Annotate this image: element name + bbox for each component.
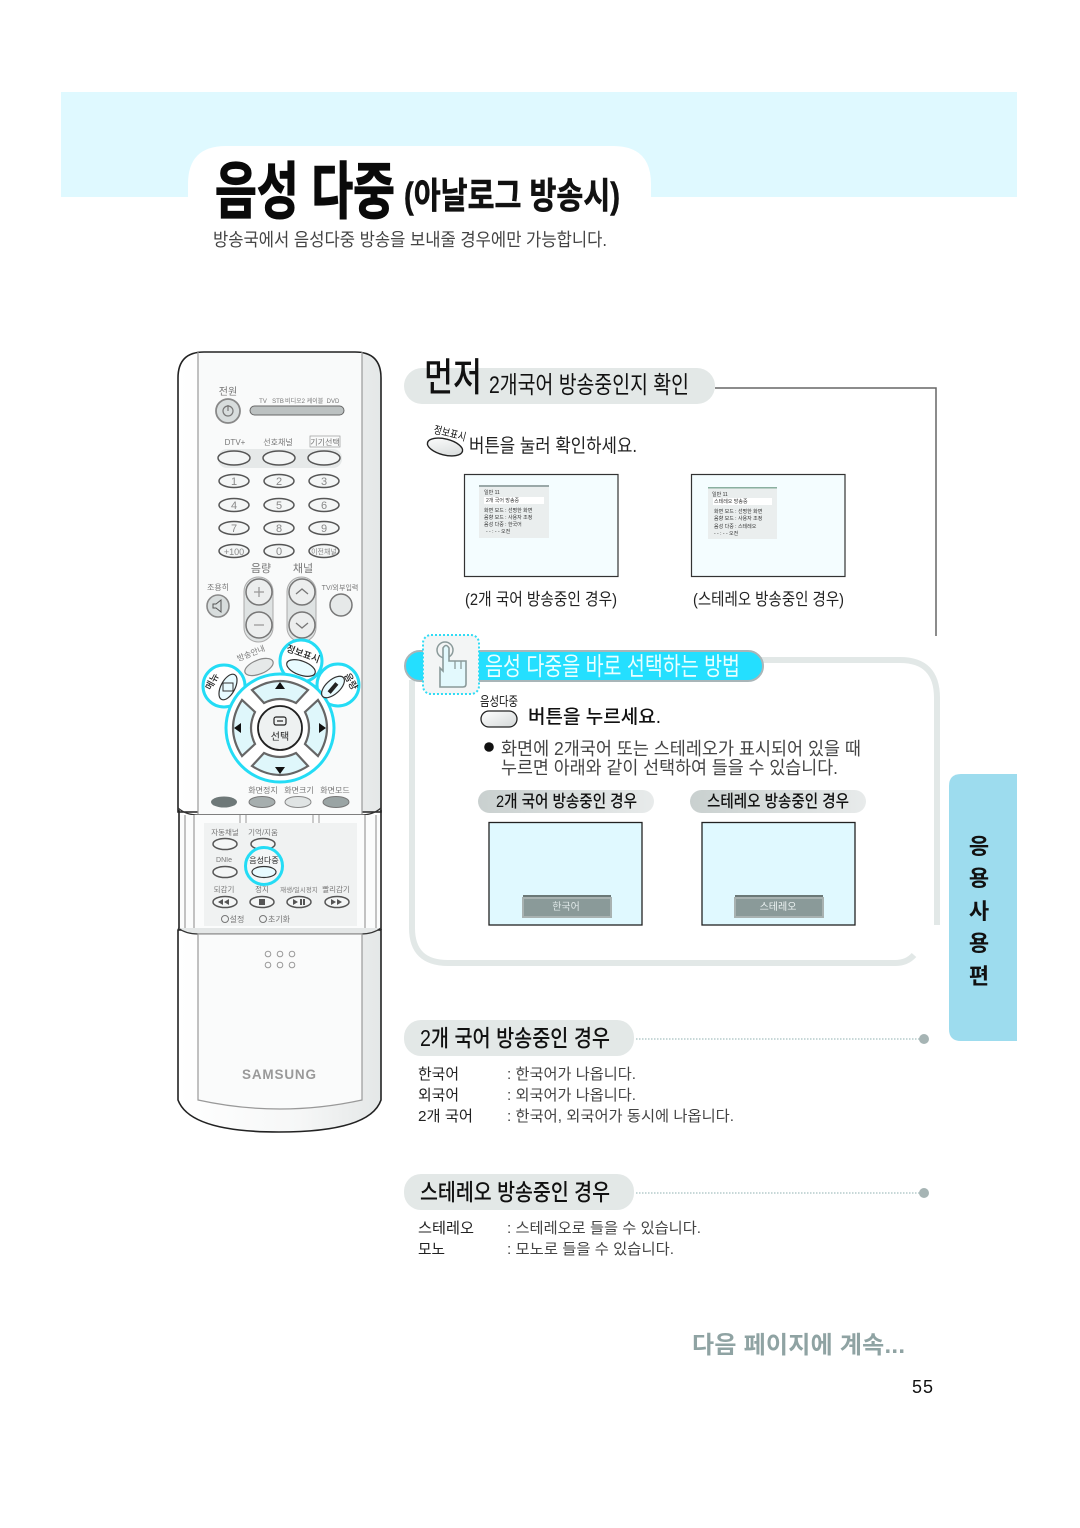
side tab: 용 <box>969 931 989 956</box>
volume and channel controls <box>207 562 358 642</box>
bullet note: 화면에 2개국어 또는 스테레오가 표시되어 있을 때 <box>501 739 861 759</box>
voice multiplex button instruction: 음성다중 <box>480 694 518 709</box>
description rows: 2개 국어 <box>418 1108 473 1125</box>
section: dual language <box>404 1020 929 1125</box>
number keypad: 3 <box>321 476 327 488</box>
option: dual language <box>478 790 654 925</box>
highlighted navigation ring <box>203 640 360 782</box>
screen: stereo broadcast: 일반 11 <box>712 491 728 498</box>
power button and mode bar: TV <box>259 399 267 405</box>
highlighted navigation ring: 정보표시 <box>285 643 322 666</box>
panel: quick selection <box>405 635 937 963</box>
brand logo: SAMSUNG <box>242 1067 316 1082</box>
title: (아날로그 방송시) <box>404 175 620 216</box>
description rows: : 모노로 들을 수 있습니다. <box>507 1241 674 1258</box>
description rows <box>418 1066 734 1125</box>
lower button panel: 재생/일시정지 <box>280 885 318 894</box>
remote control <box>178 352 381 1132</box>
option: stereo: 스테레오 방송중인 경우 <box>707 792 849 811</box>
side tab: 응 <box>969 834 989 859</box>
panel outline <box>412 660 937 963</box>
option: stereo <box>690 790 866 925</box>
number keypad: 7 <box>231 523 237 535</box>
volume and channel controls: 조용히 <box>207 582 229 592</box>
description rows: : 한국어, 외국어가 동시에 나옵니다. <box>507 1108 734 1125</box>
power button and mode bar: 케이블 <box>307 397 324 405</box>
volume and channel controls: TV/외부입력 <box>322 583 358 592</box>
bullet note: 누르면 아래와 같이 선택하여 들을 수 있습니다. <box>501 758 838 778</box>
power button and mode bar: DVD <box>327 399 340 405</box>
number keypad: +100 <box>224 547 244 557</box>
info button instruction: 버튼을 눌러 확인하세요. <box>469 435 637 457</box>
section heading: 2개 국어 방송중인 경우 <box>420 1025 610 1051</box>
step one connector line <box>715 388 936 636</box>
panel heading pill: 음성 다중을 바로 선택하는 방법 <box>485 653 740 681</box>
picture control buttons: 화면크기 <box>284 785 314 795</box>
number keypad: 6 <box>321 500 327 512</box>
volume and channel controls: 음량 <box>251 562 271 575</box>
number keypad: 1 <box>231 476 237 488</box>
screen: stereo broadcast: 화면 모드 : 선명한 화면 <box>714 508 763 515</box>
power button and mode bar: STB <box>272 399 284 405</box>
highlighted navigation ring: 메뉴 <box>203 671 222 692</box>
caption: stereo: (스테레오 방송중인 경우) <box>693 590 844 609</box>
broadcast guide button <box>235 643 276 679</box>
voice multiplex button instruction <box>480 694 661 728</box>
screen: dual language broadcast: 일반 11 <box>484 489 500 496</box>
lower button panel <box>211 827 350 924</box>
section heading: 스테레오 방송중인 경우 <box>420 1179 610 1205</box>
lower button panel: 기억/지움 <box>248 828 278 837</box>
voice multiplex button instruction: 버튼을 누르세요. <box>528 706 661 728</box>
page number: 55 <box>912 1377 933 1397</box>
power button and mode bar: 전원 <box>219 386 237 398</box>
continued on next page: 다음 페이지에 계속... <box>692 1332 905 1359</box>
lower button panel: 초기화 <box>268 915 291 924</box>
number keypad: 0 <box>276 546 282 558</box>
side tab: 용 <box>969 866 989 891</box>
screen: stereo broadcast <box>692 474 845 576</box>
dotted leader <box>636 1034 929 1044</box>
title: 음성 다중 <box>215 158 395 227</box>
number keypad: DTV+ <box>225 438 246 447</box>
description rows: : 외국어가 나옵니다. <box>507 1087 636 1104</box>
screen: dual language broadcast: 화면 모드 : 선명한 화면 <box>484 507 533 514</box>
speaker holes <box>265 951 295 968</box>
number keypad: 선호채널 <box>263 437 293 447</box>
description rows <box>418 1220 701 1258</box>
number keypad: 2 <box>276 476 282 488</box>
caption: dual language: (2개 국어 방송중인 경우) <box>465 590 617 609</box>
lower button panel: 음성다중 <box>249 856 279 865</box>
broadcast guide button: 방송안내 <box>235 643 266 663</box>
picture control buttons <box>211 785 350 808</box>
screen: stereo broadcast: 음성 다중 : 스테레오 <box>714 523 757 530</box>
screen: stereo broadcast: 음향 모드 : 사용자 조정 <box>714 515 762 522</box>
step one heading: 먼저 <box>424 357 482 400</box>
picture control buttons: 화면정지 <box>248 785 278 795</box>
volume and channel controls: 채널 <box>293 562 313 575</box>
side tab <box>949 774 1017 1041</box>
number keypad: 이전채널 <box>311 547 337 556</box>
panel heading pill <box>405 651 763 681</box>
screen: stereo broadcast: 스테레오 방송중 <box>714 498 748 505</box>
option: dual language: 2개 국어 방송중인 경우 <box>496 792 637 811</box>
remote body outline <box>178 352 381 1132</box>
step one heading <box>404 357 715 404</box>
highlighted navigation ring: 음량 <box>341 671 360 692</box>
description rows: 스테레오 <box>418 1220 474 1237</box>
description rows: : 한국어가 나옵니다. <box>507 1066 636 1083</box>
number keypad: 기기선택 <box>310 437 340 447</box>
screen: dual language broadcast: 2개 국어 방송중 <box>486 497 520 504</box>
step one heading: 2개국어 방송중인지 확인 <box>489 372 689 399</box>
info button instruction <box>426 423 637 459</box>
lower button panel: 설정 <box>230 914 244 924</box>
lower button panel: 정지 <box>255 884 269 894</box>
icon: pressing hand <box>423 635 479 694</box>
side tab: 편 <box>969 964 989 989</box>
description rows: 모노 <box>418 1241 445 1258</box>
screen: dual language broadcast: 음성 다중 : 한국어 <box>484 521 522 528</box>
screen: dual language broadcast <box>464 474 618 576</box>
lower button panel: 되감기 <box>214 884 234 894</box>
dotted leader <box>636 1188 929 1198</box>
number keypad: 5 <box>276 500 282 512</box>
side tab: 사 <box>969 899 989 924</box>
option: stereo: 스테레오 <box>760 901 796 913</box>
title tab <box>188 146 651 197</box>
info button instruction: 정보표시 <box>432 423 467 444</box>
screen: dual language broadcast: - - : - - 오전 <box>486 528 511 535</box>
section: stereo <box>404 1174 929 1258</box>
power button and mode bar: 비디오2 <box>285 397 306 405</box>
option: dual language: 한국어 <box>552 901 580 913</box>
lower button panel: 빨리감기 <box>322 884 350 894</box>
screen: dual language broadcast: 음향 모드 : 사용자 조정 <box>484 514 532 521</box>
picture control buttons: 화면모드 <box>320 785 350 795</box>
description rows: 한국어 <box>418 1066 459 1083</box>
section heading <box>404 1020 634 1056</box>
number keypad: 9 <box>321 523 327 535</box>
power button and mode bar <box>216 386 344 423</box>
bullet note <box>484 739 861 778</box>
number keypad <box>218 436 342 558</box>
lower button panel: 자동채널 <box>211 827 239 837</box>
subtitle: 방송국에서 음성다중 방송을 보내줄 경우에만 가능합니다. <box>213 230 607 250</box>
description rows: : 스테레오로 들을 수 있습니다. <box>507 1220 701 1237</box>
description rows: 외국어 <box>418 1087 459 1104</box>
header band <box>61 92 1017 197</box>
number keypad: 8 <box>276 523 282 535</box>
title <box>215 158 620 227</box>
highlighted navigation ring: 선택 <box>271 731 289 743</box>
section heading <box>404 1174 634 1210</box>
screen: stereo broadcast: - - : - - 오전 <box>714 530 739 537</box>
lower button panel: DNIe <box>216 857 232 864</box>
number keypad: 4 <box>231 500 237 512</box>
